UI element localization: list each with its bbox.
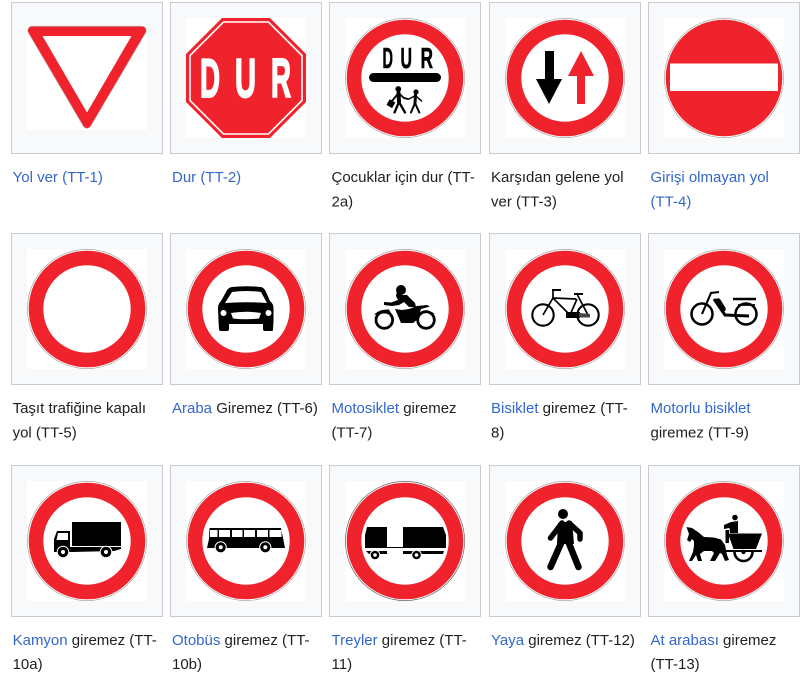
caption: 10a) <box>13 656 43 673</box>
caption: Motorlu bisiklet <box>650 400 751 417</box>
panel: Kamyon giremez TT-10a <box>12 466 162 673</box>
panel: At arabası giremez TT-13 <box>648 466 800 673</box>
panel: Motorlu bisiklet giremez TT-9 <box>648 234 800 442</box>
icon: no buses sign <box>186 481 306 601</box>
caption: Taşıt trafiğine kapalı <box>13 400 146 417</box>
icon: priority arrows sign <box>505 18 625 138</box>
icon: children stop sign <box>345 18 465 138</box>
caption: 2a) <box>332 194 353 211</box>
icon: no pedestrians sign <box>505 481 625 601</box>
caption: Kamyon giremez (TT- <box>13 632 157 649</box>
caption: Motosiklet giremez <box>332 400 457 417</box>
caption: 8) <box>491 425 504 442</box>
panel: Motosiklet giremez TT-7 <box>330 234 480 442</box>
panel: Yol ver TT-1 <box>12 2 162 186</box>
panel: Araba giremez TT-6 <box>170 234 322 417</box>
icon: no motorcycles sign <box>345 249 465 369</box>
icon: no bicycles sign <box>505 249 625 369</box>
caption: Girişi olmayan yol <box>650 169 769 186</box>
icon: no cars sign <box>186 249 306 369</box>
caption: Araba Giremez (TT-6) <box>172 400 318 417</box>
panel: Yaya giremez TT-12 <box>490 466 640 649</box>
panel: Karşıdan gelene yol ver TT-3 <box>490 2 640 211</box>
panel: Taşıt trafiğine kapalı yol TT-5 <box>12 234 162 442</box>
caption: Otobüs giremez (TT- <box>172 632 310 649</box>
icon: no entry sign <box>664 18 784 138</box>
icon: yield triangle <box>27 25 147 130</box>
icon: children stop sign: D <box>382 43 393 75</box>
caption: Yaya giremez (TT-12) <box>491 632 635 649</box>
caption: ver (TT-3) <box>491 194 557 211</box>
icon: children stop sign: R <box>420 43 433 75</box>
caption: (TT-13) <box>650 656 700 673</box>
caption: At arabası giremez <box>650 632 776 649</box>
caption: Çocuklar için dur (TT- <box>332 169 475 186</box>
panel: Bisiklet giremez TT-8 <box>490 234 640 442</box>
caption: yol (TT-5) <box>13 425 77 442</box>
icon: closed to traffic sign <box>27 249 147 369</box>
caption: giremez (TT-9) <box>650 425 749 442</box>
panel: Dur TT-2 <box>170 2 322 186</box>
caption: 10b) <box>172 656 202 673</box>
panel: Girişi olmayan yol TT-4 <box>648 2 800 211</box>
caption: Treyler giremez (TT- <box>332 632 467 649</box>
caption: Karşıdan gelene yol <box>491 169 624 186</box>
caption: (TT-4) <box>650 194 691 211</box>
icon: no horse carts sign <box>664 481 784 601</box>
icon: no trucks sign <box>27 481 147 601</box>
icon: stop octagon: R <box>271 47 291 109</box>
caption: Yol ver (TT-1) <box>13 169 103 186</box>
panel: Treyler giremez TT-11 <box>330 466 480 673</box>
icon: no mopeds sign <box>664 249 784 369</box>
icon: stop octagon: D <box>200 47 220 109</box>
panel: Otobüs giremez TT-10b <box>170 466 322 673</box>
caption: Bisiklet giremez (TT- <box>491 400 628 417</box>
icon: stop octagon: U <box>235 47 256 109</box>
icon: no trailers sign <box>345 481 465 601</box>
caption: (TT-7) <box>332 425 372 442</box>
panel: Çocuklar için dur TT-2a <box>330 2 480 211</box>
caption: 11) <box>332 656 352 673</box>
caption: Dur (TT-2) <box>172 169 241 186</box>
icon: stop octagon <box>186 18 306 138</box>
icon: children stop sign: U <box>400 43 412 75</box>
